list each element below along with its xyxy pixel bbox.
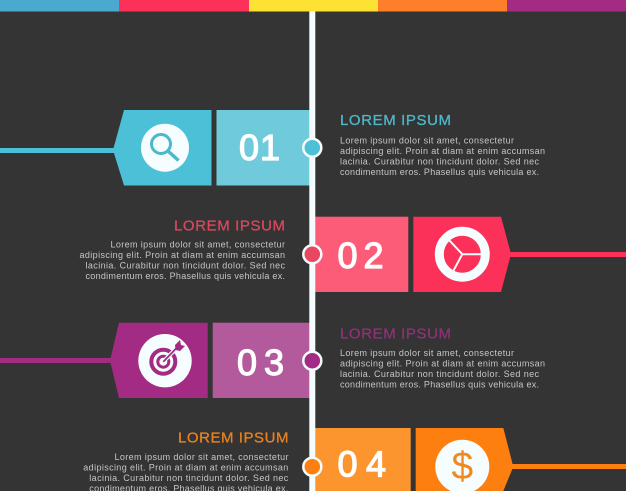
panel: step 03 <box>0 323 310 398</box>
number box 04 <box>315 428 411 491</box>
icon tab 01 <box>113 110 212 186</box>
number box 02 <box>315 217 408 292</box>
number 04: 04 <box>338 444 386 484</box>
text block 01 <box>340 136 545 177</box>
text block 04: Lorem ipsum dolor sit amet, consectetur <box>114 452 288 462</box>
text block 03: Lorem ipsum dolor sit amet, consectetur <box>340 348 514 358</box>
text block 02: adipiscing elit. Proin at diam at enim accumsan <box>80 250 285 260</box>
text block 02: Lorem ipsum dolor sit amet, consectetur <box>110 240 285 250</box>
connector line 04 <box>512 464 626 469</box>
text block 02 <box>80 240 286 281</box>
number box 03 <box>213 323 310 398</box>
text block 04: lacinia. Curabitur non tincidunt dolor. Sed nec <box>89 473 289 483</box>
connector line 03 <box>0 358 111 363</box>
number box 01 <box>216 110 310 186</box>
panel: step 02 <box>315 217 626 292</box>
central timeline <box>303 12 321 491</box>
icon: pie chart <box>439 231 485 277</box>
text block 03: condimentum eros. Phasellus quis vehicula ex. <box>340 380 539 390</box>
icon: target <box>138 334 192 387</box>
text block 04: adipiscing elit. Proin at diam at enim accumsan <box>83 462 288 472</box>
text block 02: lacinia. Curabitur non tincidunt dolor. Sed nec <box>86 261 286 271</box>
heading 01: LOREM IPSUM <box>340 112 451 129</box>
panel: step 01 <box>0 110 310 186</box>
text block 03 <box>340 348 545 390</box>
number 01: 01 <box>239 127 280 168</box>
text block 01: Lorem ipsum dolor sit amet, consectetur <box>340 136 514 146</box>
connector line 02 <box>510 252 626 257</box>
text block 03: adipiscing elit. Proin at diam at enim accumsan <box>340 358 545 368</box>
icon: magnifier <box>141 124 189 172</box>
node 02 <box>303 245 321 263</box>
node 04 <box>303 458 321 476</box>
node 01 <box>303 139 321 157</box>
number 03: 03 <box>237 342 284 383</box>
text block 02: condimentum eros. Phasellus quis vehicula ex. <box>86 271 285 281</box>
top colour band <box>0 0 626 12</box>
heading 04: LOREM IPSUM <box>178 429 288 446</box>
text block 01: adipiscing elit. Proin at diam at enim accumsan <box>340 146 545 156</box>
connector line 01 <box>0 148 115 153</box>
number 02: 02 <box>338 235 384 276</box>
heading 03: LOREM IPSUM <box>340 325 451 342</box>
text block 04 <box>83 452 289 491</box>
text block 01: lacinia. Curabitur non tincidunt dolor. Sed nec <box>340 156 540 166</box>
icon tab 03 <box>110 323 208 398</box>
icon: dollar coin <box>435 440 489 491</box>
panel: step 04 <box>315 428 626 491</box>
text block 03: lacinia. Curabitur non tincidunt dolor. Sed nec <box>340 369 540 379</box>
node 03 <box>303 352 321 370</box>
icon tab 02 <box>413 217 511 292</box>
icon tab 04 <box>416 428 513 491</box>
icon: dollar coin: $ <box>451 445 473 488</box>
text block 01: condimentum eros. Phasellus quis vehicula ex. <box>340 167 539 177</box>
heading 02: LOREM IPSUM <box>174 218 285 235</box>
